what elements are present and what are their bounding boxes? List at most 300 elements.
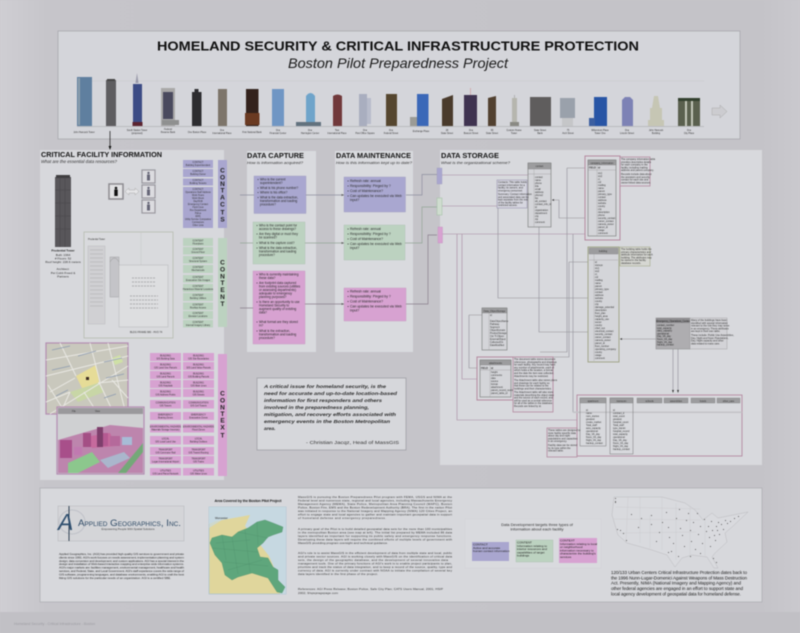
callout: quote: A critical issue for homeland security, is the bbox=[263, 384, 386, 390]
building name labels: Harrington Center bbox=[301, 132, 319, 135]
building name labels: Custom House bbox=[506, 129, 522, 132]
urban centers text: 120/133 Urban Centers Critical Infrastructure Protection dates back to bbox=[611, 570, 747, 575]
table: emergency operations center: daily_capacity bbox=[657, 330, 673, 333]
building name labels: Exchange Place bbox=[413, 131, 430, 133]
building name labels: One bbox=[276, 130, 281, 132]
building name labels: State Street bbox=[441, 132, 453, 135]
table: attachment group: and the date the item was collected. bbox=[514, 372, 554, 375]
content side label bbox=[218, 238, 227, 327]
project description: prioritize and track the status of data integration, and to keep a record of the source, quality, type and bbox=[298, 565, 452, 569]
footer band with archive caption bbox=[0, 612, 800, 633]
questions: content: What is the data extraction, bbox=[259, 246, 297, 250]
content type box: CONTENT bbox=[517, 540, 532, 544]
table: data object: Segment bbox=[490, 326, 500, 329]
contacts list: CONTACT bbox=[193, 179, 204, 182]
context list: ENVIRONMENTAL HAZARDS bbox=[150, 426, 182, 428]
content side label: N bbox=[220, 274, 225, 280]
building name labels: John Hancock Tower bbox=[73, 131, 95, 134]
maintenance: contacts: • bbox=[348, 184, 350, 188]
context list: GIS Towers bbox=[160, 404, 172, 408]
content list: CONTENT bbox=[192, 313, 204, 315]
context list: BUILDING bbox=[193, 392, 204, 394]
note: infrastructure layers: by its type within the bbox=[548, 447, 571, 450]
context list bbox=[150, 353, 215, 476]
note: company information: facility, including mailing bbox=[621, 166, 648, 169]
floor plan drawing bbox=[84, 232, 173, 338]
contacts list: CONTACT bbox=[193, 188, 204, 191]
table: data object: DateModified bbox=[490, 344, 505, 347]
maintenance: contacts: Cost of Maintenance? bbox=[350, 189, 383, 193]
note: company information: contact for each site and bbox=[621, 179, 649, 182]
context list: EMERGENCY bbox=[158, 414, 173, 416]
questions: contacts: • bbox=[258, 190, 259, 194]
questions: context: from existing sources (utilities bbox=[259, 284, 301, 288]
table group: infrastructure layers: greatest bbox=[586, 418, 595, 421]
table: company information: FIELD bbox=[589, 166, 596, 170]
table: contact: organization bbox=[535, 209, 549, 212]
note: emergency operations center: Day, Night and Noon Populations, bbox=[691, 337, 729, 340]
building name labels: Tower One bbox=[594, 132, 606, 135]
context list: TRANSPORT bbox=[191, 448, 206, 452]
questions: context: What format are they stored bbox=[259, 320, 298, 324]
content type box: interior resources and bbox=[517, 547, 547, 551]
table group: infrastructure layers: operational bbox=[613, 436, 625, 439]
note: building: attribute information for each bbox=[621, 254, 653, 257]
questions: contacts: Who is the current bbox=[260, 178, 286, 182]
icon: people relationship bbox=[109, 170, 155, 213]
note: building: primary characteristics and bbox=[621, 251, 651, 254]
project description: Police, Boston Fire, EMS and the Boston Redevelopment Authority (BRA). The first in the nation Pilot bbox=[298, 506, 452, 510]
context list: BUILDING bbox=[160, 374, 171, 376]
project description: and private sector sources. AGI is working closely with MassGIS on the identification of critical data bbox=[298, 554, 452, 558]
context type box: Information relating to local bbox=[560, 542, 597, 546]
context list: GIS Land Parcel Network bbox=[153, 472, 179, 476]
questions: context: in? bbox=[259, 324, 263, 328]
context list: TRANSPORT bbox=[191, 458, 206, 460]
table: attachment group: references, photographs and drawings bbox=[514, 361, 557, 364]
table: company information: sic2 bbox=[598, 175, 603, 178]
note: emergency operations center: identified with special information bbox=[691, 322, 728, 325]
table: attachment group: that these can be related to the bbox=[514, 385, 549, 388]
building name labels: One bbox=[363, 130, 368, 132]
content side label: O bbox=[220, 266, 225, 274]
note: company information: Records include data about bbox=[621, 173, 652, 176]
context list: TRANSPORT bbox=[158, 458, 173, 460]
project description: 2002; 9/spspragepage.com bbox=[298, 591, 338, 595]
3D city model bbox=[57, 407, 144, 474]
building name labels: Tower bbox=[511, 132, 517, 135]
maintenance: contacts: • bbox=[348, 179, 350, 183]
contacts list: Day/Shift bbox=[193, 200, 203, 203]
table group: infrastructure layers: Night_VA_day bbox=[586, 439, 602, 442]
table: attachment group: buildings and their characteristics. bbox=[514, 387, 552, 390]
project description: was initiated in response to the National Imagery and Mapping Agency (NIMA) 120 Cities Project, an bbox=[298, 509, 452, 513]
urban centers text: Act. Presently, NIMA (National Imagery and Mapping Agency) and bbox=[611, 580, 741, 586]
content list: Ground Floor bbox=[191, 251, 205, 254]
maintenance: content bbox=[344, 225, 405, 260]
context list: GIS Trains bbox=[193, 460, 205, 464]
maintenance: contacts: • bbox=[348, 194, 350, 198]
company description: design; data conversion and development; and custom applications. AGI has a special interest in the bbox=[59, 559, 184, 563]
project description: Federal level and numerous state, regional and local agencies, including Massachusetts Emergency bbox=[298, 498, 452, 502]
questions: content: be scanned? bbox=[259, 236, 277, 240]
note: emergency operations center bbox=[690, 318, 734, 349]
project description: of homeland defense and emergency preparedness. bbox=[298, 516, 386, 520]
table: building: name bbox=[595, 282, 602, 285]
note: company information: provides descriptive details bbox=[621, 161, 652, 164]
context list: EMERGENCY bbox=[191, 414, 206, 416]
maintenance: content: • bbox=[348, 237, 350, 241]
table group: infrastructure layers: backup_contact bbox=[613, 448, 630, 451]
table: company information: usage bbox=[598, 229, 605, 232]
content list: Rooftop Access bbox=[190, 306, 207, 310]
context list: GIS Address Points bbox=[156, 394, 176, 396]
subheading: How is information acquired? bbox=[247, 160, 304, 165]
table: data object: Pathway bbox=[490, 323, 500, 326]
table: emergency operations center: Emergency_Operations_Center bbox=[656, 320, 690, 323]
table: contact: comment bbox=[535, 221, 545, 224]
content side label: C bbox=[220, 260, 225, 266]
table: emergency operations center: Noon_VA_day bbox=[657, 338, 673, 341]
context list: BUILDING bbox=[193, 364, 204, 366]
context list: BUILDING bbox=[160, 356, 171, 358]
table: attachment group: The document table stores document bbox=[514, 358, 556, 361]
table: building: floor_number bbox=[595, 345, 609, 348]
contacts list: EMS bbox=[196, 216, 201, 218]
note: company information: for each company in the bbox=[621, 164, 648, 167]
context side label: X bbox=[220, 424, 225, 432]
map heading: Area Covered by the Boston Pilot Project bbox=[214, 499, 282, 503]
contacts list bbox=[183, 160, 213, 228]
contacts list: Emergency Contact bbox=[188, 203, 208, 206]
table group: infrastructure layers: other_care bbox=[723, 400, 735, 403]
table: company information: mailing bbox=[598, 184, 606, 187]
table: building: comment bbox=[595, 357, 605, 360]
building name labels: Financial Center bbox=[270, 132, 287, 135]
content type box: capabilities of target bbox=[517, 550, 545, 554]
table: attachment group bbox=[477, 357, 558, 412]
building name labels: Bank bbox=[537, 133, 543, 135]
content list: CONTENT bbox=[192, 267, 204, 269]
maintenance: context: • bbox=[348, 294, 350, 298]
table: data object: DateObjectName bbox=[490, 320, 509, 323]
questions: contacts: What is the data extraction, bbox=[260, 196, 298, 200]
note: emergency operations center: Day, Night capacity and other bbox=[691, 340, 724, 343]
table: contact: contact bbox=[536, 165, 544, 168]
company description: AGI's major markets are: facilities management, environmental management, healthcare and health bbox=[59, 566, 184, 570]
questions: context: • bbox=[256, 300, 258, 304]
table: data object: ProductStorage bbox=[490, 332, 507, 335]
note: infrastructure layers: store facility specific data bbox=[548, 432, 576, 435]
table: attachment group: comments bbox=[491, 374, 503, 377]
building name labels: Arch Street bbox=[562, 132, 574, 135]
table: building: usage bbox=[595, 354, 602, 357]
map: Boston pilot area: Worcester bbox=[215, 516, 228, 520]
building name labels: Two bbox=[335, 130, 340, 132]
context type box: information necessary to bbox=[560, 548, 594, 552]
maintenance: content: • bbox=[348, 227, 350, 231]
table group: infrastructure layers: Day_VA_day bbox=[613, 439, 628, 442]
table: company information: ct2 bbox=[598, 181, 602, 184]
table: building: capacity_use bbox=[595, 318, 610, 321]
table: building: county bbox=[595, 300, 603, 303]
panel: header bbox=[58, 31, 740, 139]
project description: effort to engage state and local agencies to gather and maintain important geospatial data in support bbox=[298, 512, 452, 516]
note: contact: restricted access. bbox=[498, 204, 518, 207]
content list bbox=[183, 238, 214, 328]
table: company information: name bbox=[598, 187, 605, 190]
table: data object: CollectedOn bbox=[490, 341, 504, 344]
maintenance: content: Cost of Maintenance? bbox=[350, 237, 383, 241]
table: company information: primary_type bbox=[598, 193, 612, 196]
table group: infrastructure layers: Day_VA_day bbox=[586, 433, 601, 436]
arrow: next buildings bbox=[712, 105, 727, 118]
context side label: N bbox=[220, 404, 225, 412]
maintenance: content: • bbox=[348, 242, 350, 246]
company description: fitting GIS solutions for the particular needs of an organization. AGI is a certified SBE. bbox=[59, 576, 171, 580]
3D city model: File bbox=[72, 411, 76, 413]
street map bbox=[46, 343, 128, 414]
table: building: parcel_id bbox=[595, 342, 605, 345]
questions: content: procedure? bbox=[259, 253, 275, 257]
content list: CONTENT bbox=[192, 258, 204, 260]
context list: GIS Land Value Parcels bbox=[186, 366, 212, 370]
maintenance: contacts: Refresh rate: annual bbox=[350, 179, 381, 183]
note: company information: owner-linked data sources. bbox=[621, 181, 651, 184]
building name labels: International Place bbox=[327, 132, 347, 135]
content side label: E bbox=[220, 287, 225, 294]
project description: AGI's role is to assist MassGIS in the efficient development of data from multiple state and local, public bbox=[298, 551, 452, 555]
maintenance: content: input? bbox=[350, 246, 359, 250]
questions: content: access to these drawings? bbox=[259, 227, 296, 231]
note: company information bbox=[620, 157, 656, 186]
company description bbox=[59, 552, 184, 580]
note: emergency operations center: data related to mass care. bbox=[691, 342, 720, 345]
table: emergency operations center: Day_VA_day bbox=[657, 335, 672, 338]
table group: infrastructure layers: Total_staff bbox=[613, 424, 624, 427]
note: building bbox=[620, 247, 653, 266]
table: building: address bbox=[595, 294, 604, 297]
table group: infrastructure layers: name bbox=[586, 412, 593, 415]
building name labels: One bbox=[625, 130, 630, 132]
project description: MassGIS providing program oversight and technical guidance. bbox=[298, 541, 388, 545]
content side label: T bbox=[221, 280, 225, 287]
table: company information: parent bbox=[598, 190, 605, 193]
table group: infrastructure layers: apartment bbox=[588, 400, 599, 403]
content list: Structural System bbox=[189, 260, 207, 263]
table: attachment group: Records are linked by id. bbox=[514, 405, 542, 408]
questions: context: Homeland Security to bbox=[259, 304, 289, 308]
context side label: E bbox=[220, 418, 225, 424]
content list: CONTENT bbox=[192, 322, 204, 324]
questions: context: • bbox=[256, 329, 258, 333]
project description: layers identified as important for supporting its public safety and emergency response functions. bbox=[298, 534, 452, 538]
table: attachment group: and the source of each record, and bbox=[514, 397, 553, 400]
content list: CONTENT bbox=[192, 240, 204, 242]
context side label bbox=[218, 354, 227, 476]
table: data object: ObjectDomain bbox=[490, 329, 506, 332]
table: data object: id bbox=[490, 314, 493, 317]
table: attachment group: parent_record_number bbox=[491, 389, 516, 392]
questions: contacts: procedure? bbox=[260, 202, 276, 206]
context side label: O bbox=[220, 398, 225, 404]
project description: data layers identified in the first phase of the project. bbox=[298, 572, 378, 576]
context list: LOCAL bbox=[162, 438, 170, 440]
logo: Applied Geographics: Empowering People With Spatial Solutions bbox=[101, 527, 155, 531]
contacts list: Building Tenants bbox=[190, 182, 207, 185]
table group: infrastructure layers: schools bbox=[645, 400, 654, 403]
questions: context: these data? bbox=[259, 276, 276, 280]
tower caption: Pei Cobb Freed & bbox=[51, 271, 76, 275]
table group: infrastructure layers: Noon_VA_day bbox=[613, 442, 629, 445]
table: contact bbox=[528, 163, 552, 227]
building name labels bbox=[73, 128, 695, 135]
heading: DATA MAINTENANCE bbox=[336, 151, 411, 160]
table: building: owner_contact bbox=[595, 336, 611, 339]
callout: quote bbox=[257, 378, 406, 450]
project description: References: AGI Press Release; Boston Police, Safe City Plan; CATS Users Manual, 2001; HSIP bbox=[298, 587, 443, 591]
connector lines bbox=[442, 168, 679, 420]
maintenance: context: • bbox=[348, 300, 350, 304]
table: attachment group: The Attachment table also stores plans bbox=[514, 379, 558, 382]
contacts side label: O bbox=[220, 174, 225, 182]
context list: GIS Hospitals bbox=[158, 384, 173, 388]
questions: context: or assessing departments) bbox=[259, 288, 296, 292]
context list: GIS Land Use Parcels bbox=[154, 366, 178, 370]
table: emergency operations center: operational bbox=[657, 332, 669, 335]
project description: Management Agency (MEMA), State Police, Metropolitan Area Planning Council (MAPC), Boston bbox=[298, 502, 452, 506]
building name labels: First National Bank bbox=[242, 131, 263, 134]
company description: design and installation of Web-based interactive mapping and enterprise wide information systems. bbox=[59, 562, 184, 566]
project description: management tools. One of the primary functions of AGI's work is to enable project participants to plan, bbox=[298, 562, 452, 566]
table: company information: company_information bbox=[591, 162, 614, 165]
context list: LOCAL bbox=[195, 438, 203, 440]
company description: GIS software, programming languages, and database environments, enabling AGI to craft the best bbox=[59, 572, 184, 576]
table: contact: name bbox=[535, 179, 542, 182]
maintenance: context: Refresh rate: annual bbox=[350, 290, 381, 294]
context list: Evacuation Zones bbox=[189, 416, 209, 420]
table: contact: title bbox=[535, 185, 539, 188]
table: company information: contact bbox=[598, 196, 606, 199]
heading: DATA STORAGE bbox=[441, 151, 499, 160]
context list: GIS Building Data bbox=[156, 358, 175, 360]
table: contact: alt_contact bbox=[535, 200, 547, 203]
contacts list: Utility Service Companies bbox=[185, 218, 212, 221]
questions: content: • bbox=[256, 232, 258, 236]
context list: GIS Building Parcels bbox=[188, 376, 210, 378]
note: infrastructure layers: relevant table. bbox=[548, 450, 564, 453]
questions: content: Are they digital or must they bbox=[259, 232, 298, 236]
table: company information: camera_owner bbox=[598, 223, 614, 226]
urban centers text: local agency development of geospatial data for homeland defense. bbox=[611, 592, 741, 596]
questions: contacts: • bbox=[258, 196, 259, 200]
note: infrastructure layers: populations and capacities bbox=[548, 437, 578, 440]
table: building: height_area bbox=[595, 315, 608, 318]
context list: Flood Zones bbox=[192, 430, 206, 432]
company description: clients since 1991. AGI's work focuses on needs assessment, implementation planning and system bbox=[59, 555, 184, 559]
icon: tower bbox=[55, 175, 71, 247]
note: company information: the operators and security bbox=[621, 176, 651, 179]
tower caption: Prudential Tower bbox=[51, 248, 75, 252]
table group: infrastructure layers: transcom bbox=[617, 400, 626, 403]
maintenance: context: Responsibility: Pinged by ? bbox=[350, 294, 391, 298]
floor plan drawing: BLDG FRAME 680 - HVO 74 bbox=[130, 331, 163, 334]
building name labels: International Place bbox=[212, 132, 232, 135]
contact type box: human contact information bbox=[473, 549, 510, 553]
table: attachment group: Attachments may be restricted. bbox=[514, 375, 549, 378]
contacts side label: T bbox=[221, 188, 225, 194]
table: attachment group: materials describing the object state bbox=[514, 394, 554, 397]
table: company information: sic1 bbox=[598, 172, 603, 175]
table: attachment group: format bbox=[491, 383, 498, 386]
context type box: or neighborhood bbox=[560, 545, 583, 549]
contacts side label: C bbox=[220, 202, 225, 208]
table group: infrastructure layers: id bbox=[586, 409, 589, 412]
note: infrastructure layers: These tables are designed to bbox=[548, 429, 581, 432]
table: building: mailing bbox=[595, 279, 603, 282]
table: building: sic1 bbox=[595, 267, 600, 270]
table: attachment group: The Attachment table will also store bbox=[514, 391, 554, 394]
table group: infrastructure layers: Total_staff bbox=[586, 424, 597, 427]
content list: CONTENT bbox=[192, 304, 204, 306]
questions: contacts: What is his phone number? bbox=[260, 186, 298, 190]
content type box: Information relating to bbox=[517, 544, 547, 548]
panel: data development types: information about each facility bbox=[511, 526, 563, 532]
contacts list: Work Week bbox=[192, 197, 205, 200]
panel: data maintenance bbox=[335, 151, 413, 352]
table: building: building bbox=[599, 250, 608, 253]
questions: context: planning purposes? bbox=[259, 295, 287, 299]
building name labels: Federal Street bbox=[384, 132, 399, 135]
storage tabs: contacts, content, context bbox=[437, 168, 442, 243]
table: contact: address bbox=[535, 191, 544, 194]
note: emergency operations center: are kept in their own table. bbox=[691, 330, 721, 333]
table: building: sic2 bbox=[595, 270, 600, 273]
maintenance: contacts: input? bbox=[350, 198, 359, 202]
subheading: What is the organizational scheme? bbox=[441, 160, 511, 165]
table group: infrastructure layers bbox=[573, 395, 742, 456]
arrow: tower to facility info bbox=[109, 131, 111, 150]
building name labels: State Street bbox=[486, 132, 498, 135]
table: building: floor_plan bbox=[595, 312, 606, 315]
note: contact: kept separate from the rest bbox=[498, 199, 528, 202]
tower caption: Built: 1964 bbox=[56, 253, 71, 257]
contacts list: CONTACT bbox=[193, 161, 204, 164]
table: building: id bbox=[595, 261, 598, 264]
contacts list: CONTACT bbox=[193, 170, 204, 173]
building name labels: Reserve Bank bbox=[161, 131, 176, 134]
table: attachment group: for each facility. Any record may have bbox=[514, 364, 556, 367]
table: building: security_contact bbox=[595, 333, 613, 336]
table: building: operating_company bbox=[595, 348, 617, 351]
map: Boston pilot area bbox=[209, 507, 286, 594]
table: attachment group: date bbox=[491, 377, 496, 380]
table: building: city bbox=[595, 303, 599, 306]
table group: infrastructure layers: greatest bbox=[613, 418, 622, 421]
table: emergency operations center: contact_number bbox=[657, 324, 674, 327]
context list: BUILDING bbox=[193, 374, 204, 376]
note: emergency operations center: in an emergency. These attributes bbox=[691, 327, 729, 330]
questions: context: Who is currently maintaining bbox=[259, 272, 299, 276]
connector lines: capture to storage bbox=[240, 174, 437, 308]
table group: infrastructure layers: hospital_record bbox=[613, 430, 630, 433]
context list: UTILITIES bbox=[193, 470, 204, 472]
panel: bottom bbox=[40, 488, 762, 602]
panel: data storage bbox=[440, 150, 762, 465]
table group: infrastructure layers: contract_d bbox=[613, 412, 625, 415]
maintenance: content: Can updates be executed via Web bbox=[350, 242, 402, 246]
maintenance: context: input? bbox=[350, 308, 359, 312]
